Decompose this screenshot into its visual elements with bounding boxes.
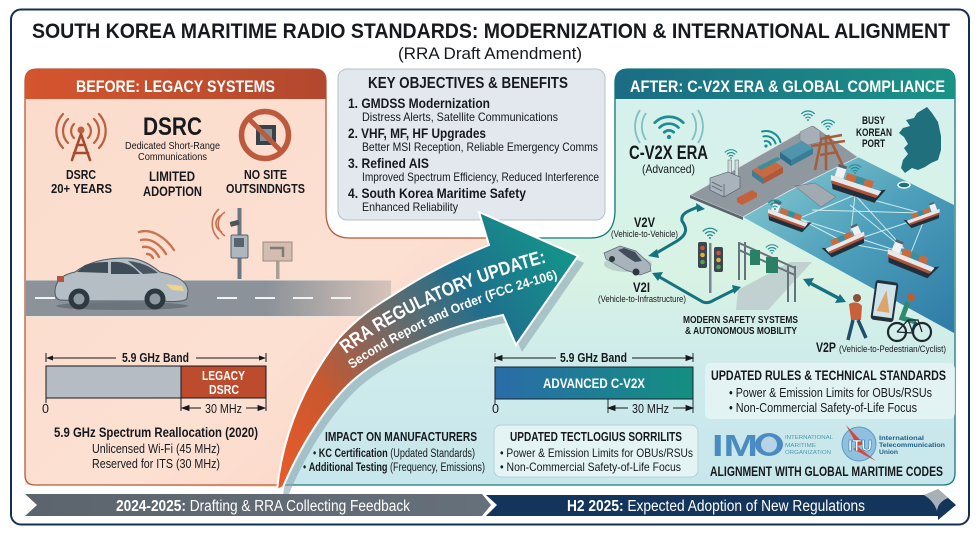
advanced C-V2X bar bbox=[495, 367, 693, 399]
water bbox=[743, 157, 954, 333]
icon: vehicle bbox=[604, 246, 652, 276]
arrow: V2I bbox=[652, 272, 741, 303]
bar outline bbox=[46, 366, 266, 411]
objective 4: Enhanced Reliability bbox=[362, 200, 458, 214]
V2I label: (Vehicle-to-Infrastructure) bbox=[598, 294, 686, 304]
modern safety systems text: MODERN SAFETY SYSTEMS bbox=[683, 314, 798, 326]
after header bar bbox=[615, 69, 955, 99]
DSRC definition: Communications bbox=[138, 151, 207, 163]
icon: no site prohibition bbox=[242, 112, 288, 158]
30 MHz label: 30 MHz bbox=[632, 402, 669, 416]
V2P label bbox=[816, 340, 946, 355]
icon: gantry bbox=[739, 242, 795, 302]
DSRC years text: 20+ YEARS bbox=[51, 181, 112, 196]
V2V label bbox=[611, 215, 678, 239]
C-V2X era label bbox=[629, 143, 708, 176]
objective 1 bbox=[348, 95, 558, 124]
impact on manufacturers: • KC Certification (Updated Standards) bbox=[313, 448, 475, 460]
logo: IMO: IM bbox=[712, 428, 758, 463]
arrow: V2P bbox=[803, 278, 846, 303]
limited adoption text bbox=[143, 169, 202, 199]
logo: ITU: International bbox=[879, 435, 924, 442]
box: updated rules: • Non-Commercial Safety-of-Life Focus bbox=[729, 401, 917, 415]
busy Korean port label: KOREAN bbox=[856, 127, 892, 139]
busy Korean port label: BUSY bbox=[862, 115, 885, 127]
ship network links bbox=[800, 195, 924, 255]
V2V label: (Vehicle-to-Vehicle) bbox=[611, 229, 678, 239]
road bbox=[26, 279, 391, 317]
legacy DSRC segment: DSRC bbox=[209, 382, 239, 397]
panel: key objectives bbox=[338, 69, 605, 220]
icon: island bbox=[898, 182, 910, 188]
box: updated technical results: UPDATED TECTLOGIUS SORRILITS bbox=[510, 429, 682, 444]
timeline phase 1: 2024-2025: Drafting & RRA Collecting Feedback bbox=[116, 498, 410, 515]
icon: silver car bbox=[55, 258, 188, 310]
before header bar bbox=[25, 69, 326, 99]
impact on manufacturers: • Additional Testing (Frequency, Emissions) bbox=[303, 462, 485, 474]
pier bbox=[795, 183, 836, 207]
timeline phase 2 bbox=[486, 495, 955, 516]
busy Korean port label: PORT bbox=[862, 138, 885, 150]
DSRC years text bbox=[51, 167, 112, 196]
spectrum reallocation text: Unlicensed Wi-Fi (45 MHz) bbox=[92, 442, 220, 456]
bar label: ADVANCED C-V2X bbox=[543, 375, 646, 391]
V2V label: V2V bbox=[634, 215, 655, 230]
port factory bbox=[710, 160, 740, 197]
icon: DSRC tower bbox=[56, 114, 106, 160]
port platform bbox=[690, 125, 858, 220]
DSRC definition: Dedicated Short-Range bbox=[125, 140, 220, 152]
arrow: RRA regulatory update bbox=[276, 210, 584, 494]
icon: roadside unit bbox=[212, 208, 248, 279]
icon: road sign bbox=[263, 242, 292, 279]
limited adoption text: LIMITED bbox=[149, 169, 195, 184]
legacy DSRC segment bbox=[181, 366, 266, 398]
subtitle: (RRA Draft Amendment) bbox=[398, 45, 582, 63]
V2P label: (Vehicle-to-Pedestrian/Cyclist) bbox=[839, 344, 946, 355]
port wifi signals bbox=[703, 111, 861, 254]
V2I label bbox=[598, 280, 686, 304]
30 MHz arrows bbox=[182, 406, 265, 410]
ships bbox=[765, 163, 943, 281]
objective 3 bbox=[348, 155, 599, 184]
box: updated technical results: • Power & Emission Limits for OBUs/RSUs bbox=[500, 446, 693, 460]
impact on manufacturers: IMPACT ON MANUFACTURERS bbox=[325, 429, 477, 444]
logo: IMO bbox=[712, 428, 834, 463]
spectrum reallocation text bbox=[54, 425, 258, 471]
no site text: OUTSINDNGTS bbox=[226, 181, 305, 196]
spectrum reallocation text: 5.9 GHz Spectrum Reallocation (2020) bbox=[54, 425, 258, 440]
port crane bbox=[811, 135, 845, 170]
logo: IMO: MARITIME bbox=[785, 443, 816, 449]
no site text: NO SITE bbox=[244, 167, 287, 182]
modern safety systems text: & AUTONOMOUS MOBILITY bbox=[685, 325, 797, 337]
V2I label: V2I bbox=[633, 280, 650, 295]
no site text bbox=[226, 167, 305, 196]
band dimension arrows bbox=[46, 353, 266, 362]
logo: ITU: Telecommunication bbox=[879, 442, 945, 449]
box: updated rules bbox=[705, 363, 955, 419]
logo: IMO: ORGANIZATION bbox=[785, 450, 831, 456]
C-V2X era label: (Advanced) bbox=[642, 162, 695, 176]
box: updated rules: • Power & Emission Limits for OBUs/RSUs bbox=[729, 386, 932, 400]
band dimension arrows bbox=[495, 353, 693, 413]
objective 3: 3. Refined AIS bbox=[348, 155, 429, 171]
legacy DSRC segment: LEGACY bbox=[202, 368, 245, 383]
DSRC years text: DSRC bbox=[66, 167, 96, 182]
unlicensed segment bbox=[46, 366, 181, 398]
zero tick: 0 bbox=[42, 402, 49, 416]
DSRC heading: DSRC bbox=[143, 113, 202, 141]
before heading: BEFORE: LEGACY SYSTEMS bbox=[76, 78, 275, 96]
warehouse bbox=[800, 126, 820, 145]
band label: 5.9 GHz Band bbox=[560, 351, 627, 365]
icon: signal waves bbox=[139, 231, 174, 258]
DSRC definition bbox=[125, 140, 220, 163]
icon: smart road bbox=[736, 262, 812, 310]
objectives heading: KEY OBJECTIVES & BENEFITS bbox=[368, 75, 568, 92]
panel: before legacy systems bbox=[25, 69, 510, 487]
objective 2: 2. VHF, MF, HF Upgrades bbox=[348, 125, 486, 141]
spectrum chart: legacy bbox=[42, 351, 266, 416]
logo: ITU bbox=[842, 425, 945, 461]
objective 4 bbox=[348, 185, 526, 214]
busy Korean port label bbox=[856, 115, 892, 150]
limited adoption text: ADOPTION bbox=[143, 184, 202, 199]
icon: smartphone bbox=[870, 280, 899, 322]
impact on manufacturers bbox=[303, 429, 485, 474]
objective 3: Improved Spectrum Efficiency, Reduced Interference bbox=[362, 170, 599, 184]
map: South Korea bbox=[899, 107, 941, 173]
timeline bbox=[25, 489, 956, 520]
panel: after C-V2X bbox=[283, 69, 955, 485]
spectrum chart: advanced bbox=[492, 351, 693, 416]
objective 4: 4. South Korea Maritime Safety bbox=[348, 185, 526, 201]
logo: ITU: ITU bbox=[848, 438, 872, 455]
box: updated technical results bbox=[494, 425, 698, 477]
C-V2X era label: C-V2X ERA bbox=[629, 143, 708, 164]
icon: pedestrian bbox=[848, 294, 866, 340]
icon: cyclist bbox=[888, 293, 931, 341]
icon: traffic lights bbox=[698, 242, 723, 293]
objective 2 bbox=[348, 125, 598, 154]
box: updated technical results: • Non-Commercial Safety-of-Life Focus bbox=[500, 460, 681, 474]
objective 1: 1. GMDSS Modernization bbox=[348, 95, 490, 111]
timeline phase 2: H2 2025: Expected Adoption of New Regulations bbox=[567, 498, 865, 515]
V2P label: V2P bbox=[816, 340, 836, 355]
spectrum reallocation text: Reserved for ITS (30 MHz) bbox=[92, 457, 220, 471]
objective 2: Better MSI Reception, Reliable Emergency Comms bbox=[362, 140, 598, 154]
objective 1: Distress Alerts, Satellite Communications bbox=[362, 110, 558, 124]
zero tick: 0 bbox=[492, 402, 499, 416]
arrow headline: RRA REGULATORY UPDATE: bbox=[338, 251, 546, 354]
arrow subline: Second Report and Order (FCC 24-106) bbox=[348, 270, 557, 368]
icon: C-V2X wifi bbox=[635, 110, 703, 143]
timeline end arrow bbox=[924, 489, 956, 520]
arrow: V2V bbox=[648, 203, 705, 258]
band label: 5.9 GHz Band bbox=[122, 351, 189, 365]
logo: ITU: Union bbox=[879, 449, 898, 456]
modern safety systems text bbox=[683, 314, 798, 337]
timeline phase 1 bbox=[25, 494, 491, 516]
30 MHz label: 30 MHz bbox=[205, 402, 242, 416]
logo: IMO: INTERNATIONAL bbox=[785, 435, 834, 441]
containers bbox=[737, 141, 813, 205]
